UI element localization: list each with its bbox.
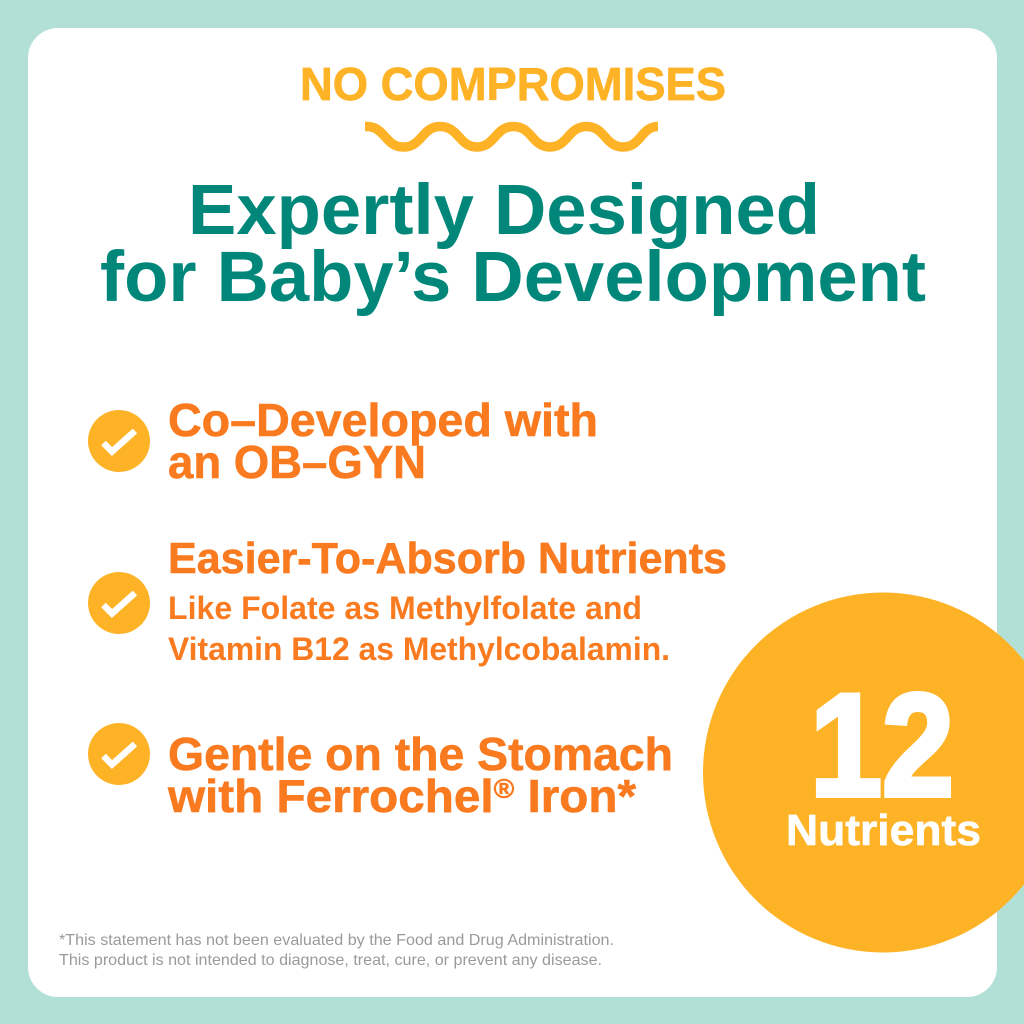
footnote disclaimer: *This statement has not been evaluated by the Food and Drug Administration. xyxy=(59,932,614,949)
benefit 3 text: ® xyxy=(494,774,514,804)
title xyxy=(100,171,926,317)
benefit 1 text xyxy=(168,394,598,488)
eyebrow heading: NO COMPROMISES xyxy=(300,58,726,110)
benefit 3 text: Iron* xyxy=(514,770,636,822)
title: Expertly Designed xyxy=(188,171,820,250)
benefit 1 text: an OB–GYN xyxy=(168,436,426,488)
benefit 2 text: Vitamin B12 as Methylcobalamin. xyxy=(168,631,670,667)
benefit: gentle on the stomach xyxy=(88,723,673,822)
icon: check badge 3 xyxy=(88,723,150,785)
benefit 2 text xyxy=(168,534,727,667)
benefit 3 text xyxy=(167,728,673,822)
benefit 2 text: Easier-To-Absorb Nutrients xyxy=(168,534,727,583)
benefit 3 text: Gentle on the Stomach xyxy=(168,728,673,780)
benefit: easier-to-absorb nutrients xyxy=(88,534,727,667)
callout: 12 nutrients badge: Nutrients xyxy=(786,806,981,855)
icon: check badge 1 xyxy=(88,410,150,472)
benefit 1 text: Co–Developed with xyxy=(168,394,598,446)
icon: check badge 2 xyxy=(88,572,150,634)
footnote disclaimer xyxy=(59,932,614,969)
wavy underline xyxy=(365,126,658,147)
callout: 12 nutrients badge: 12 xyxy=(810,664,954,826)
callout: 12 nutrients badge xyxy=(703,592,1024,952)
footnote disclaimer: This product is not intended to diagnose, treat, cure, or prevent any disease. xyxy=(59,952,602,969)
benefit 3 text: with Ferrochel xyxy=(168,770,482,822)
benefit 2 text: Like Folate as Methylfolate and xyxy=(168,590,642,626)
title: for Baby’s Development xyxy=(100,238,926,317)
benefit: co-developed with an OB-GYN xyxy=(88,394,598,488)
